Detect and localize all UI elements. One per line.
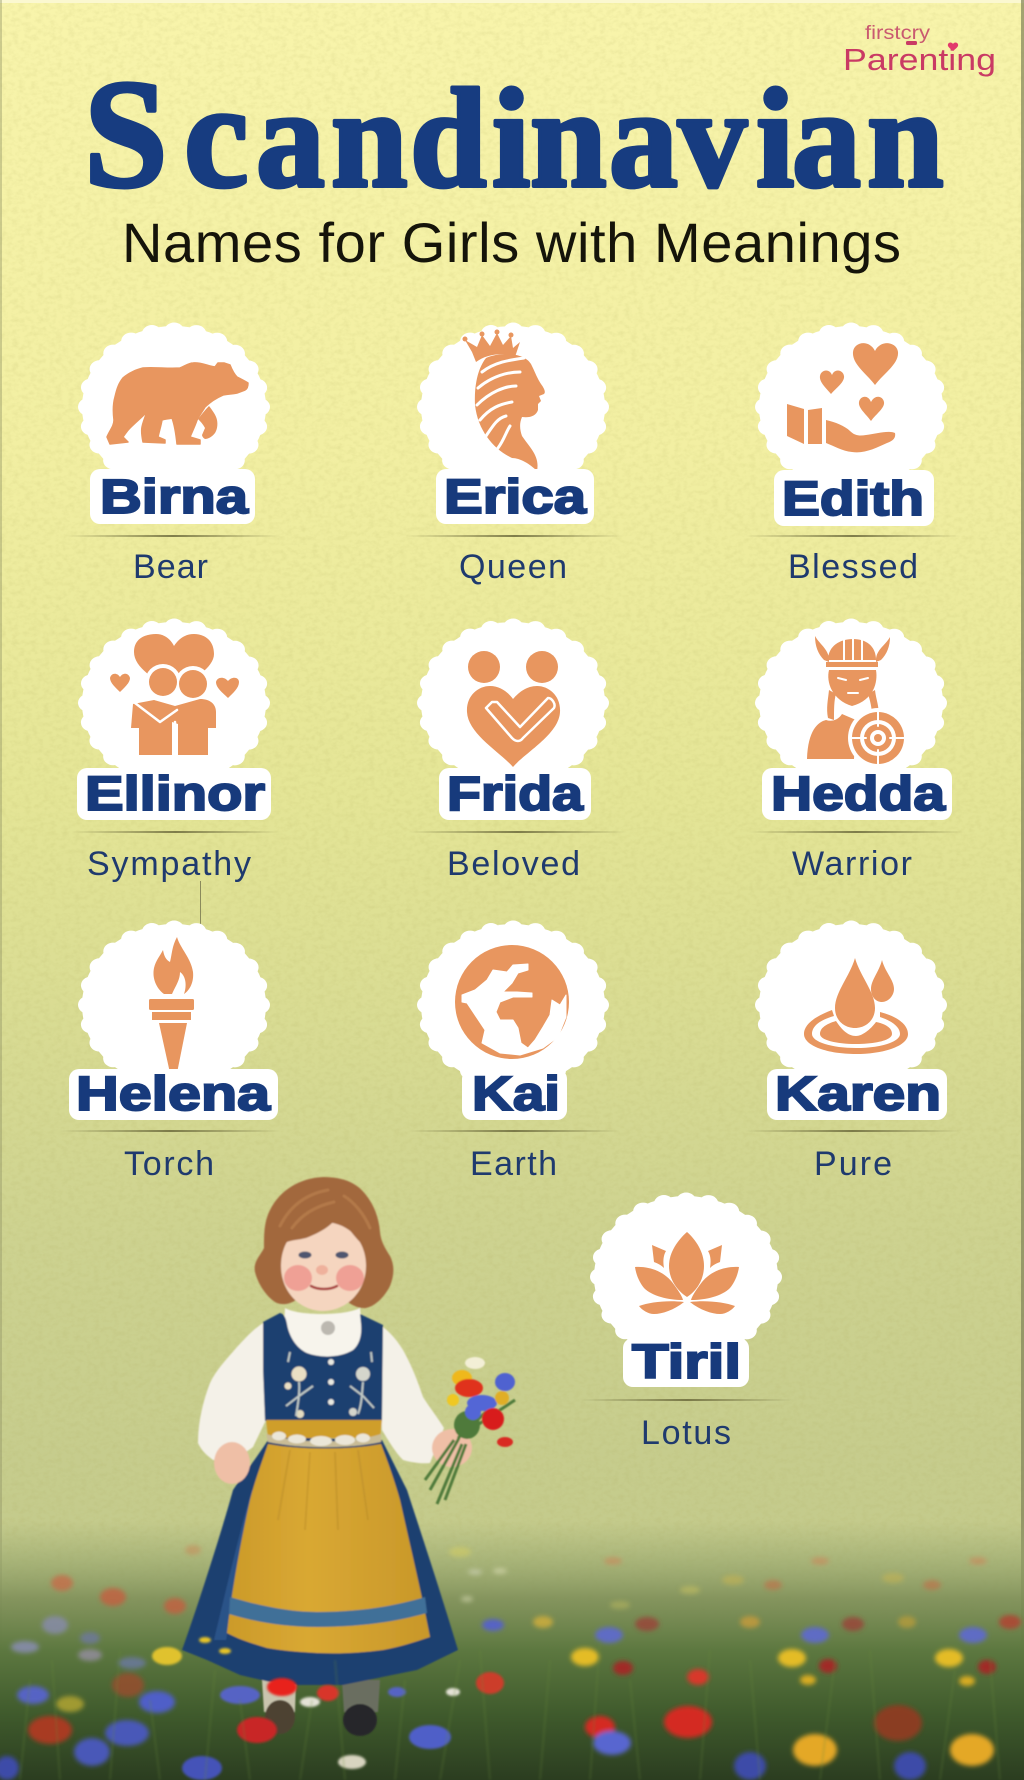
icon: torch xyxy=(149,937,194,1073)
subtitle: Names for Girls with Meanings xyxy=(122,211,901,274)
blouse front and collar xyxy=(282,1308,366,1360)
card: Frida xyxy=(408,622,627,883)
meadow background xyxy=(0,1520,1024,1780)
icon: heart with two figures xyxy=(467,651,560,767)
meadow flowers in front of the girl xyxy=(152,1637,504,1780)
apron xyxy=(227,1444,430,1653)
card: Kai xyxy=(408,924,620,1183)
meadow flowers behind the girl xyxy=(0,1545,1021,1780)
hair highlights xyxy=(280,1190,370,1228)
card: Karen: Karen xyxy=(775,1068,941,1121)
icon: queen with crown xyxy=(462,330,545,471)
eyes xyxy=(298,1252,312,1258)
logo: FirstCry Parenting: Parenting xyxy=(843,42,996,77)
card: Erica: Queen xyxy=(459,548,567,586)
card: Ellinor: Sympathy xyxy=(87,845,251,883)
card: Hedda: Hedda xyxy=(771,768,945,821)
legs and shoes xyxy=(262,1680,380,1736)
card: Tiril: Tiril xyxy=(632,1336,741,1389)
face xyxy=(281,1222,366,1311)
title: andinavian xyxy=(256,60,944,217)
card: Edith: Edith xyxy=(782,473,924,526)
card: Helena: Helena xyxy=(76,1068,270,1121)
card: Frida: Beloved xyxy=(447,845,580,883)
navy skirt xyxy=(182,1437,458,1685)
icon: viking warrior xyxy=(807,636,908,768)
card: Birna: Birna xyxy=(100,471,248,524)
title: c xyxy=(184,52,249,218)
apron trim xyxy=(229,1597,427,1627)
card: Erica: Erica xyxy=(444,471,586,524)
waistband and belt xyxy=(266,1420,382,1447)
card: Tiril xyxy=(580,1196,793,1452)
card: Tiril: Lotus xyxy=(641,1414,731,1452)
logo: FirstCry Parenting xyxy=(843,23,996,77)
vertical connector line xyxy=(200,881,201,925)
icon: hugging friends xyxy=(110,634,239,755)
card: Edith: Blessed xyxy=(788,548,918,586)
card: Frida: Frida xyxy=(447,768,583,821)
title: S xyxy=(84,49,168,221)
bodice embroidery and buttons xyxy=(284,1352,374,1418)
card: Birna xyxy=(65,326,281,586)
card: Kai: Kai xyxy=(472,1068,560,1121)
card: Ellinor xyxy=(71,622,280,883)
icon: lotus xyxy=(635,1232,739,1314)
nose and mouth xyxy=(316,1265,328,1275)
card: Hedda xyxy=(748,622,965,883)
icon: globe xyxy=(455,945,569,1059)
card: Hedda: Warrior xyxy=(792,845,912,883)
apron gathers xyxy=(278,1450,368,1530)
hair xyxy=(255,1177,393,1308)
card: Kai: Earth xyxy=(470,1145,557,1183)
card: Birna: Bear xyxy=(133,548,208,586)
card: Karen: Pure xyxy=(814,1145,892,1183)
skirt fold xyxy=(214,1490,262,1640)
hands xyxy=(214,1429,472,1484)
blouse sleeves xyxy=(198,1323,268,1460)
icon: water drops xyxy=(804,958,908,1054)
icon: hand with hearts xyxy=(787,343,898,452)
cheeks xyxy=(284,1265,312,1291)
illustration: girl in Scandinavian dress xyxy=(182,1177,515,1736)
card: Karen xyxy=(745,924,960,1183)
fringe xyxy=(278,1198,368,1250)
card: Ellinor: Ellinor xyxy=(85,768,265,821)
logo: FirstCry Parenting: firstcry xyxy=(865,23,931,44)
card: Edith xyxy=(745,326,961,586)
card: Helena: Torch xyxy=(124,1145,214,1183)
card: Erica xyxy=(405,326,624,586)
icon: bear xyxy=(107,363,248,444)
card: Helena xyxy=(59,924,281,1183)
bodice xyxy=(263,1313,383,1421)
bouquet xyxy=(425,1357,515,1504)
brooch xyxy=(321,1321,335,1335)
meadow grass blades xyxy=(20,1640,1000,1780)
